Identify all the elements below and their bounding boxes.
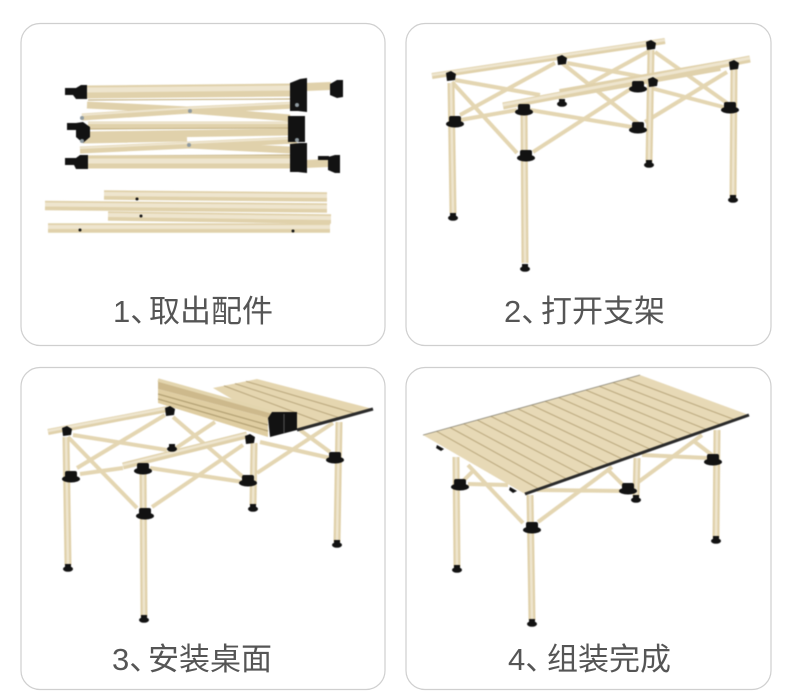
folded frame bundle	[65, 78, 343, 173]
panel: step 3 install tabletop	[21, 368, 385, 690]
label: step 1: 取出配件	[149, 294, 273, 329]
tabletop rolled out part	[213, 379, 373, 430]
label: step 4: 组装完成	[547, 642, 671, 677]
label: step 2: 2、	[504, 294, 552, 329]
label: step 1: 1、	[113, 294, 161, 329]
label: step 3: 3、	[112, 642, 160, 677]
table legs	[45, 194, 331, 232]
panel: step 4 assembly complete	[406, 368, 771, 690]
label: step 2: 打开支架	[541, 294, 665, 329]
tabletop	[423, 375, 749, 494]
tabletop folded part	[158, 380, 297, 437]
panel: step 1 take out parts	[21, 24, 385, 346]
half assembled table drawing	[48, 379, 373, 623]
label: step 4: 4、	[508, 642, 556, 677]
open frame drawing	[432, 40, 750, 272]
label: step 3: 安装桌面	[148, 642, 272, 677]
finished table drawing	[423, 375, 749, 627]
panel: step 2 open frame	[406, 24, 771, 346]
